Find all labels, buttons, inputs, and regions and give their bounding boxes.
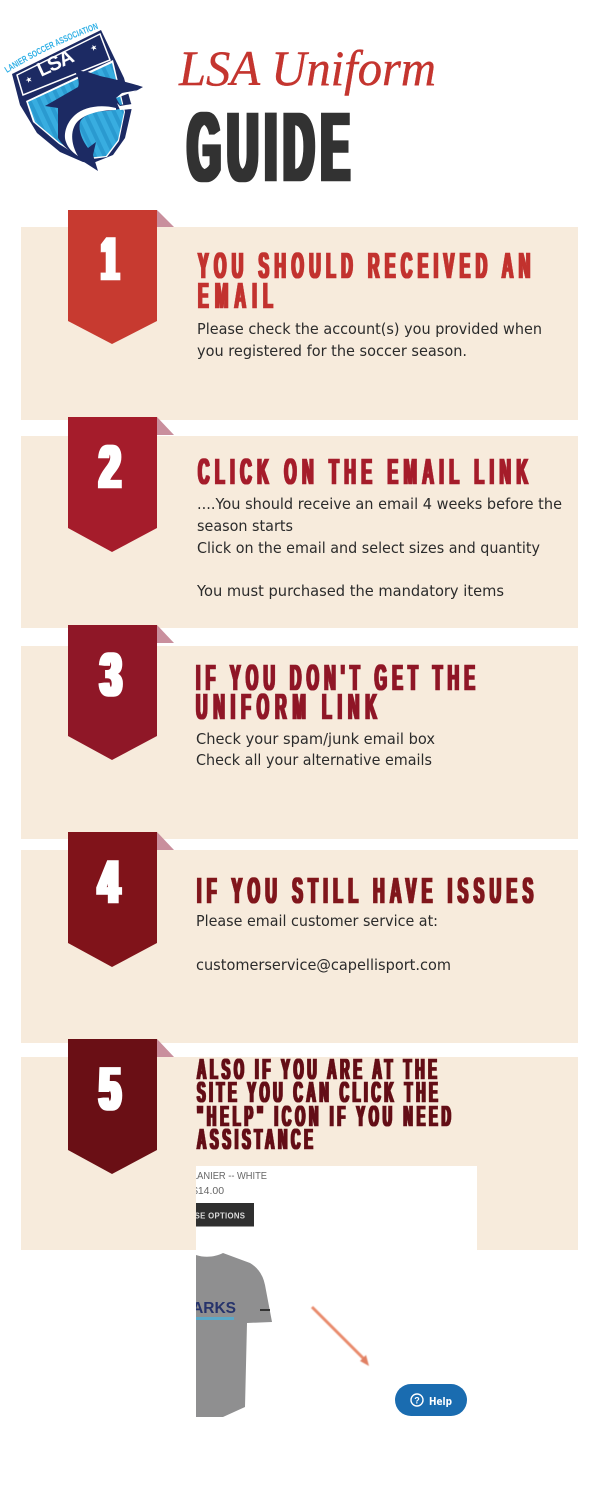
heading: step 3: [196, 657, 475, 727]
product text and button: CHOOSE OPTIONS: [170, 1212, 245, 1220]
panel: step 1: [21, 210, 578, 420]
text: step 4: Please email customer service at:: [196, 912, 438, 930]
screenshot: shop page with help button: [170, 1166, 477, 1420]
ribbon: step 5: 5: [100, 1055, 120, 1123]
arrow: [312, 1307, 369, 1366]
ribbon: step 2: [68, 417, 174, 552]
logo: LSA shark shield: LSA: [34, 46, 78, 82]
ribbon: step 2: 2: [100, 433, 120, 501]
text: step 1: [197, 320, 542, 360]
ribbon: step 1: 1: [102, 226, 118, 293]
ribbon: step 1: [68, 210, 174, 344]
heading: step 3: UNIFORM LINK: [196, 686, 377, 727]
panel: step 5: [21, 1039, 578, 1250]
heading: step 5: [197, 1053, 451, 1155]
t-shirt: ARKS: [192, 1300, 236, 1317]
product text and button: $14.00: [192, 1185, 224, 1197]
ribbon: step 5: [68, 1039, 174, 1174]
ribbon: step 3: [68, 625, 174, 760]
logo: LSA shark shield: [4, 22, 143, 171]
product text and button: LANIER -- WHITE: [192, 1170, 267, 1182]
text: step 3: Check your spam/junk email box: [196, 730, 435, 748]
logo: LSA shark shield: ★: [24, 74, 34, 85]
heading: step 5: SITE YOU CAN CLICK THE: [197, 1076, 438, 1108]
title: LSA Uniform: LSA Uniform: [178, 40, 436, 96]
panel: step 4: [21, 832, 578, 1043]
ribbon: step 4: 4: [99, 848, 120, 916]
text: step 1: you registered for the soccer season.: [197, 342, 467, 360]
help button: ?: [414, 1396, 420, 1406]
text: step 3: [196, 730, 435, 769]
text: step 4: customerservice@capellisport.com: [196, 956, 451, 974]
heading: step 4: IF YOU STILL HAVE ISSUES: [197, 870, 533, 911]
heading: step 5: ASSISTANCE: [197, 1123, 313, 1155]
logo: LSA shark shield: ★: [89, 42, 99, 53]
text: step 2: [196, 495, 562, 600]
title: GUIDE: GUIDE: [188, 92, 349, 201]
heading: step 5: ALSO IF YOU ARE AT THE: [197, 1053, 437, 1085]
ribbon: step 4: [68, 832, 174, 967]
heading: step 2: CLICK ON THE EMAIL LINK: [198, 451, 528, 492]
heading: step 1: EMAIL: [198, 275, 273, 316]
product text and button: [196, 1172, 267, 1226]
ribbon: step 3: 3: [101, 641, 121, 709]
heading: step 1: YOU SHOULD RECEIVED AN: [198, 245, 530, 286]
t-shirt: [190, 1253, 272, 1417]
panel: step 3: [21, 625, 578, 839]
heading: step 3: IF YOU DON'T GET THE: [196, 657, 475, 698]
help button: Help: [429, 1395, 452, 1408]
text: step 1: Please check the account(s) you provided when: [197, 320, 542, 338]
text: step 2: season starts: [197, 517, 293, 535]
text: step 2: ....You should receive an email 4 weeks before the: [197, 495, 562, 513]
heading: step 5: "HELP" ICON IF YOU NEED: [197, 1100, 451, 1132]
help button: [395, 1384, 467, 1416]
text: step 3: Check all your alternative emails: [196, 751, 432, 769]
text: step 4: [196, 912, 451, 974]
logo arc text: LANIER SOCCER ASSOCIATION: [4, 22, 98, 73]
heading: step 1: [198, 245, 530, 316]
text: step 2: Click on the email and select sizes and quantity: [197, 539, 540, 557]
panel: step 2: [21, 417, 578, 628]
text: step 2: You must purchased the mandatory items: [196, 582, 504, 600]
